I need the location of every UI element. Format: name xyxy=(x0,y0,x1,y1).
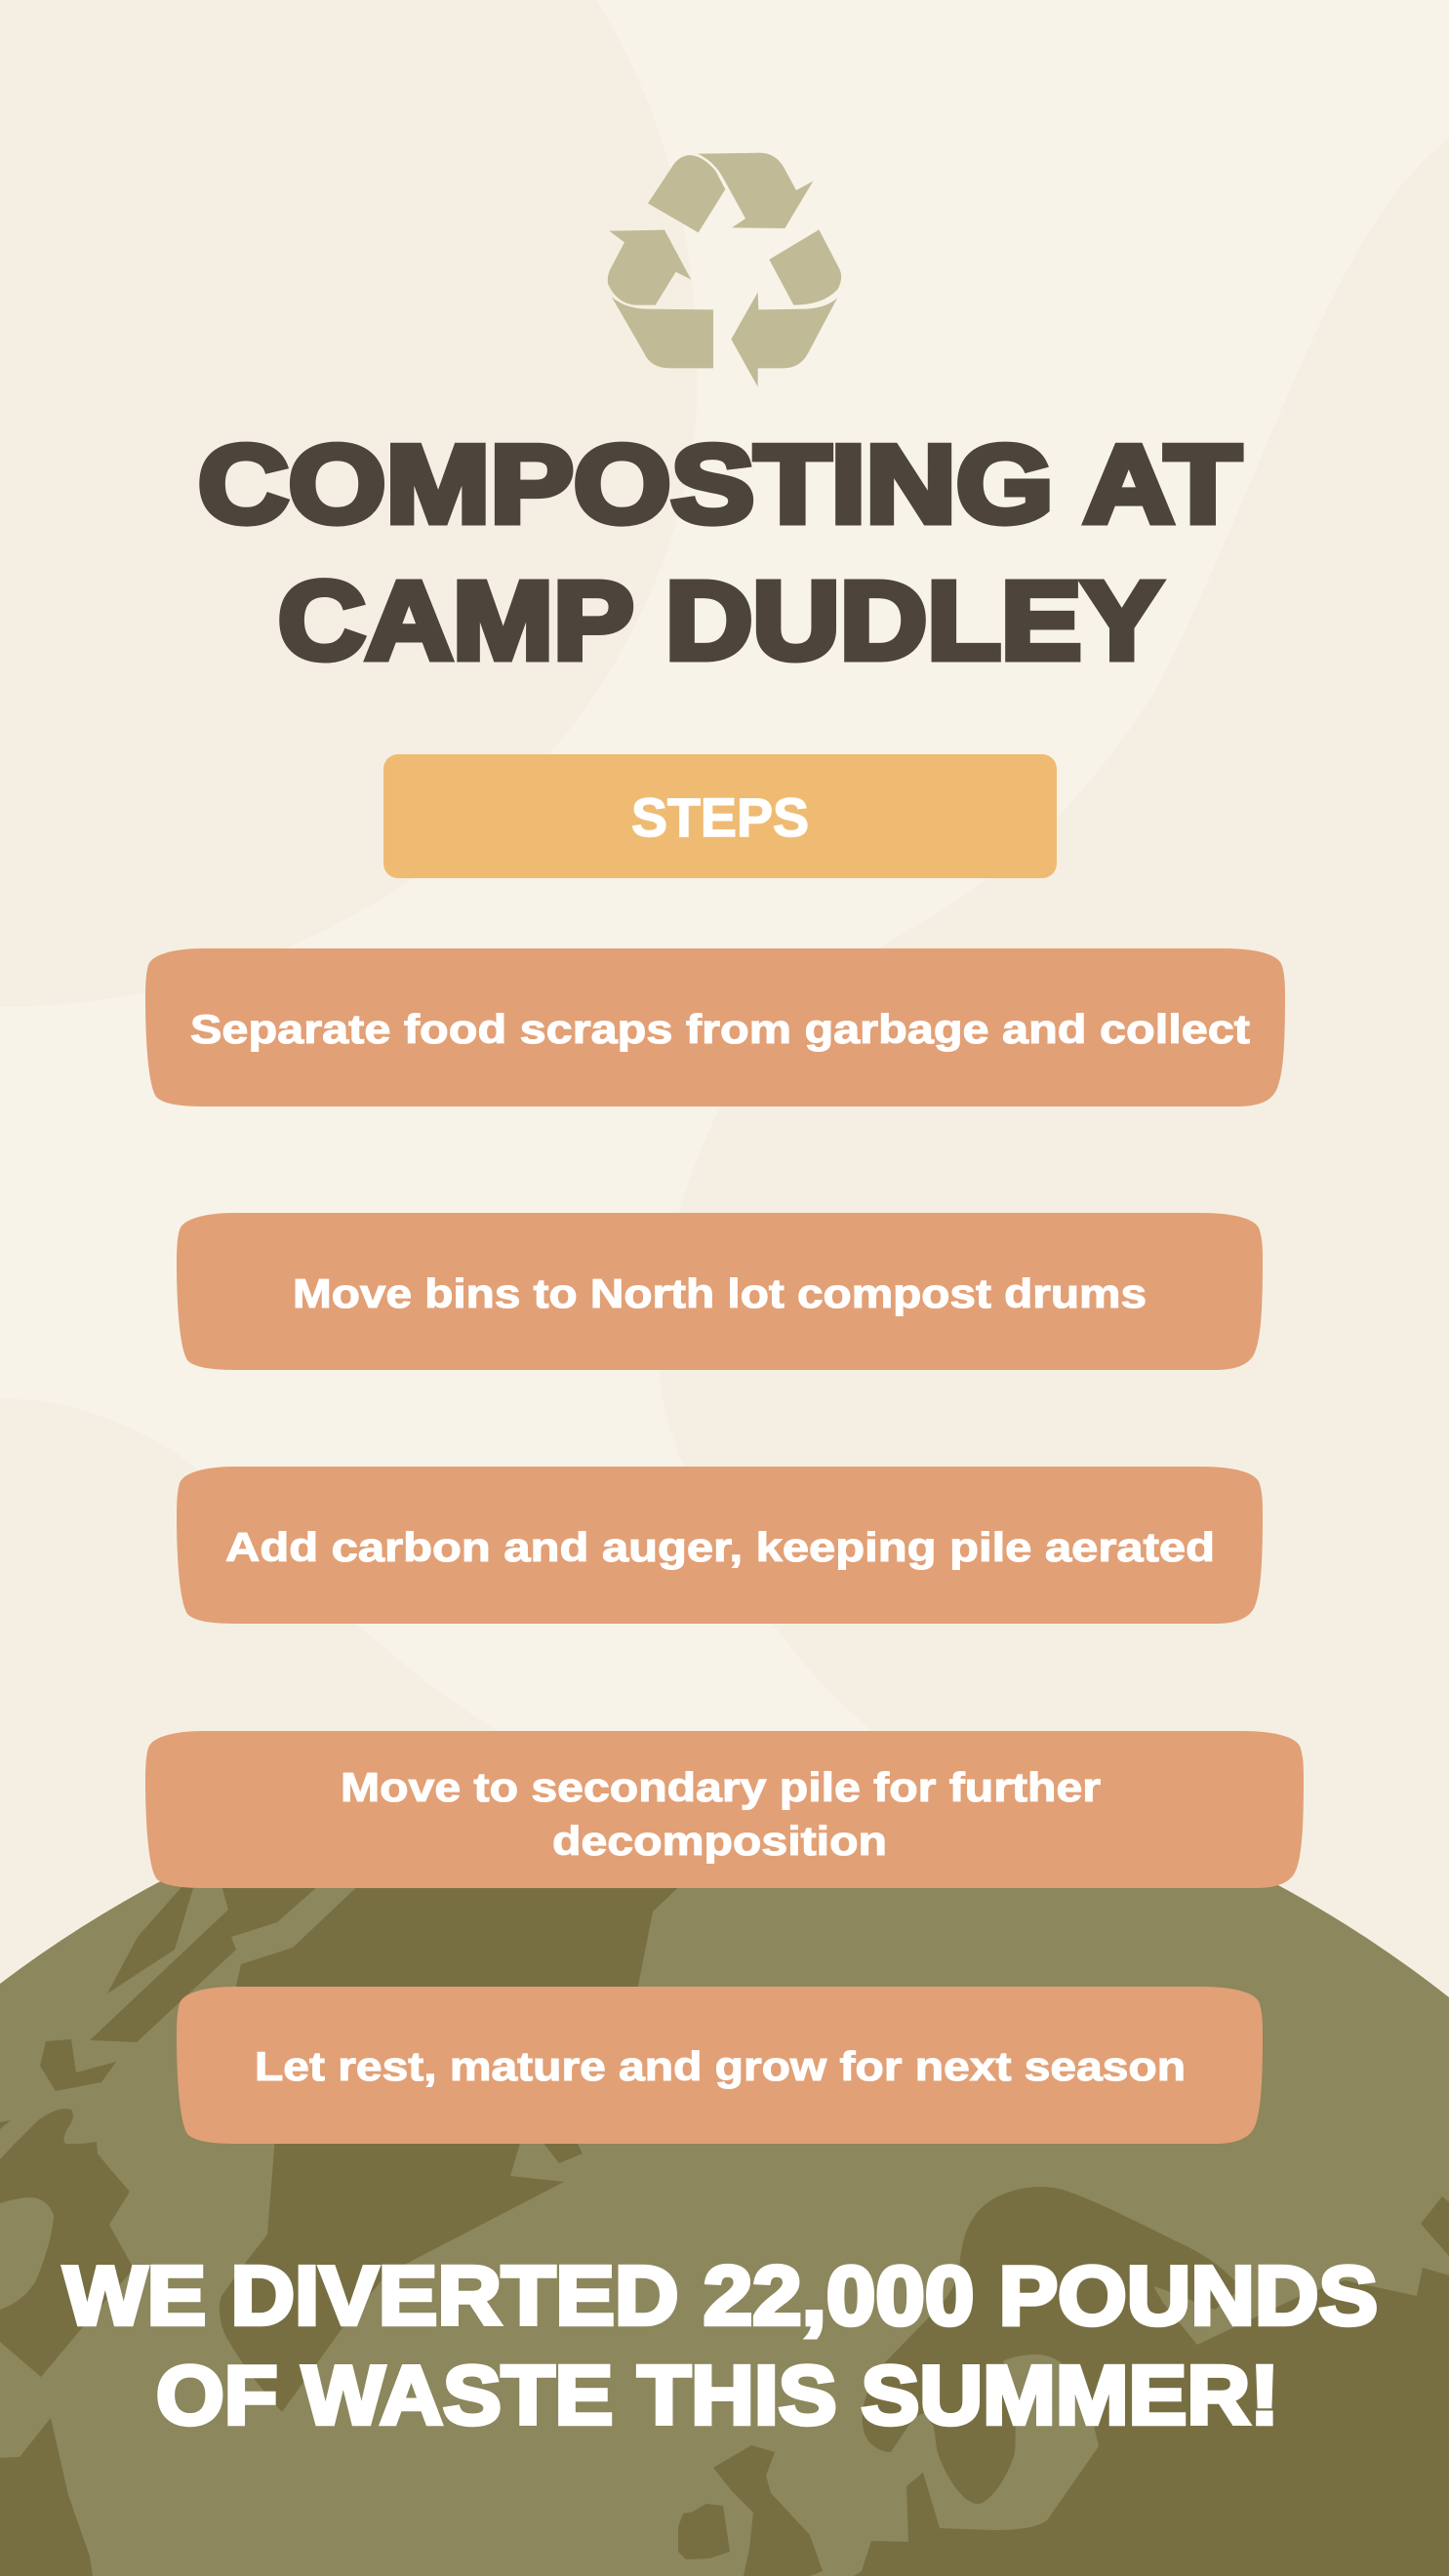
globe illustration xyxy=(0,1743,1449,2576)
step 1: Separate food scraps from garbage and collect xyxy=(190,1006,1250,1052)
step 2: Move bins to North lot compost drums xyxy=(293,1270,1147,1316)
callout: waste diverted xyxy=(63,2250,1378,2442)
title: CAMP DUDLEY xyxy=(278,559,1162,682)
step 3: Add carbon and auger, keeping pile aerated xyxy=(225,1524,1215,1570)
step 1 xyxy=(145,948,1285,1107)
icon: recycling symbol xyxy=(608,153,841,387)
step 2 xyxy=(177,1213,1263,1370)
step 4: decomposition xyxy=(552,1818,887,1864)
step 5: Let rest, mature and grow for next season xyxy=(255,2043,1186,2089)
title xyxy=(198,423,1241,682)
title: COMPOSTING AT xyxy=(198,423,1241,545)
step 3 xyxy=(177,1467,1263,1624)
heading: steps xyxy=(383,754,1057,878)
step 4 xyxy=(145,1731,1304,1888)
callout: waste diverted: OF WASTE THIS SUMMER! xyxy=(156,2350,1279,2442)
heading: steps: STEPS xyxy=(631,786,809,848)
callout: waste diverted: WE DIVERTED 22,000 POUNDS xyxy=(63,2250,1378,2343)
step 5 xyxy=(177,1987,1263,2144)
step 4: Move to secondary pile for further xyxy=(341,1764,1101,1810)
